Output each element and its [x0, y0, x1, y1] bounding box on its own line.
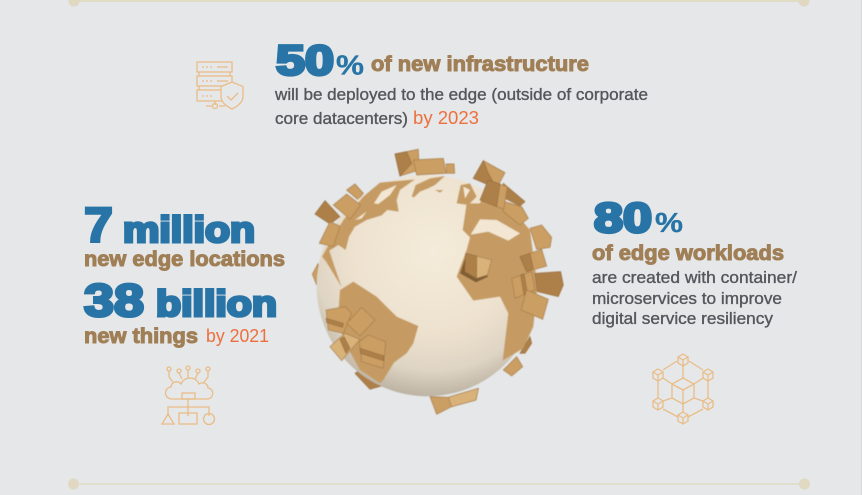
stat: 80% of edge workloads: microservices to improve [592, 290, 782, 308]
stat: 80% of edge workloads: are created with container/ [592, 269, 797, 287]
stat: 7 million and 38 billion: 7 [84, 199, 113, 253]
stat: 80% of edge workloads: 80 [594, 194, 652, 241]
stat: 80% of edge workloads [592, 194, 797, 328]
light land patches [355, 185, 520, 241]
stat: 7 million and 38 billion: billion [156, 283, 277, 324]
stat: 80% of edge workloads: of edge workloads [592, 242, 784, 265]
globe with cardboard boxes [312, 149, 563, 414]
stat: 50% of new infrastructure: % [336, 50, 364, 80]
stat: 7 million and 38 billion [84, 199, 285, 348]
stat: 7 million and 38 billion: 38 [84, 275, 144, 326]
stat: 7 million and 38 billion: new edge locations [84, 248, 285, 271]
continents [322, 176, 537, 383]
stat: 50% of new infrastructure: core datacenters) [275, 110, 408, 128]
icon: cloud network [162, 366, 214, 424]
icon: hexagonal cube network [653, 354, 713, 424]
stat: 50% of new infrastructure: by 2023 [413, 107, 479, 128]
stat: 50% of new infrastructure: of new infrastructure [371, 53, 589, 76]
stat: 50% of new infrastructure: 50 [276, 36, 334, 84]
stat: 80% of edge workloads: digital service resiliency [592, 310, 774, 328]
stat: 50% of new infrastructure: will be deployed to the edge (outside of corporate [274, 86, 648, 104]
rear boxes [312, 149, 552, 389]
front boxes [315, 158, 563, 414]
bottom rule [68, 478, 810, 490]
stat: 7 million and 38 billion: new things [84, 325, 198, 348]
icon: server with shield [197, 62, 243, 109]
stat: 50% of new infrastructure [274, 36, 648, 128]
stat: 7 million and 38 billion: million [123, 209, 255, 250]
top rule [68, 0, 810, 6]
stat: 80% of edge workloads: % [655, 207, 683, 238]
sphere [317, 175, 538, 396]
stat: 7 million and 38 billion: by 2021 [206, 325, 269, 346]
